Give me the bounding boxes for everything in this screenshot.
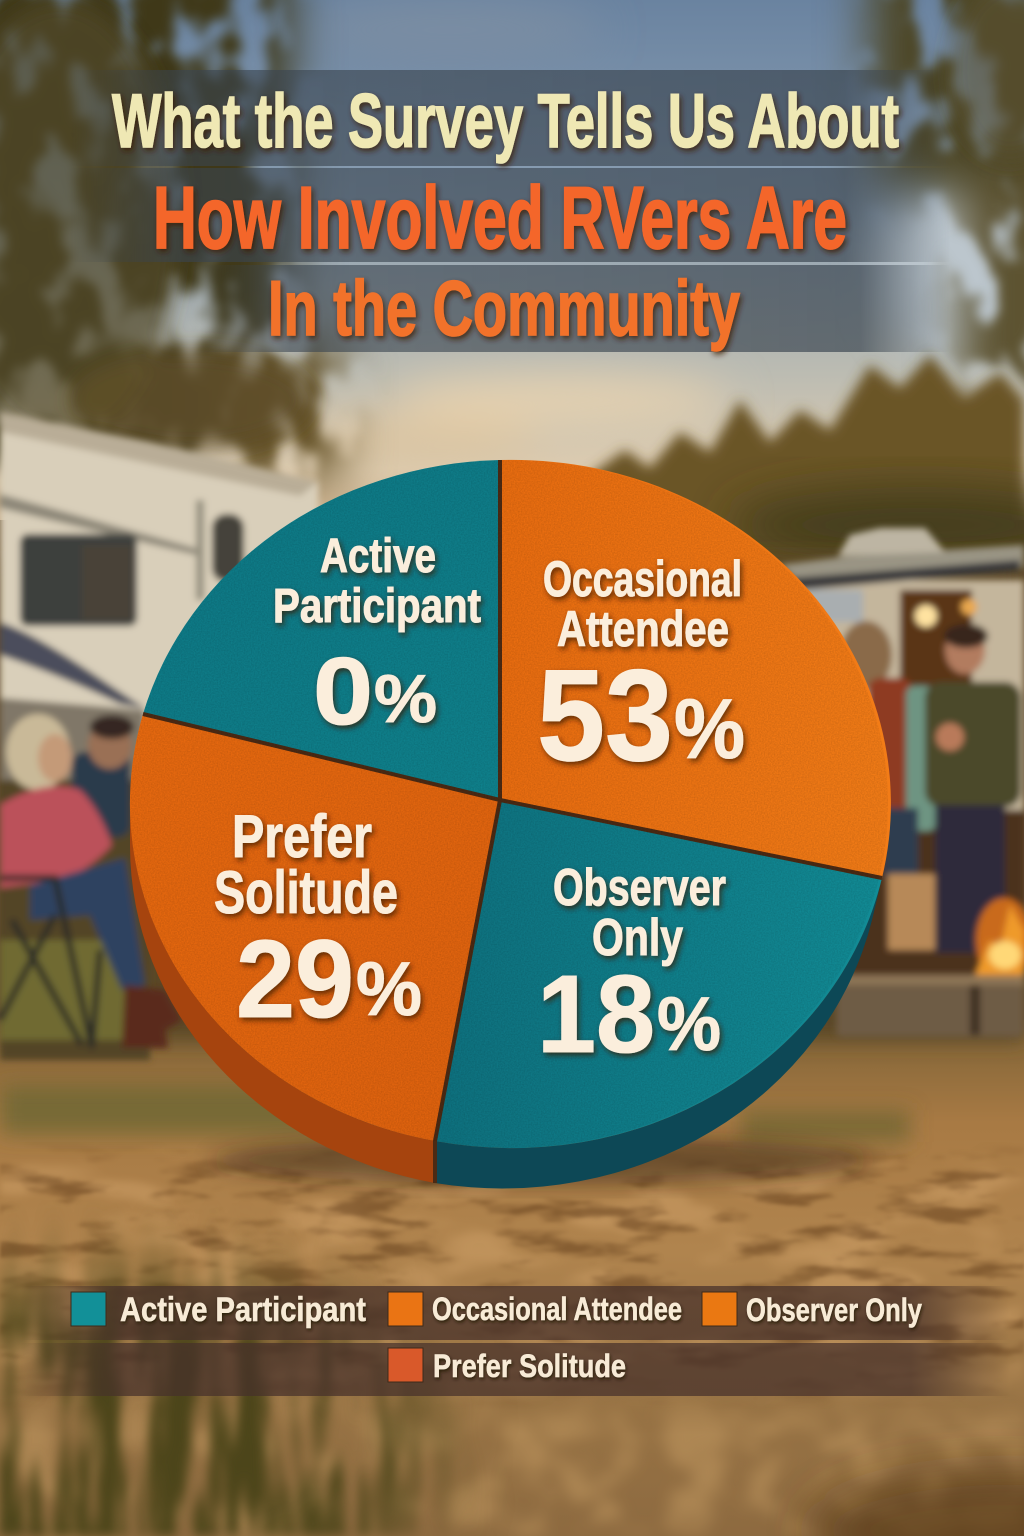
label: prefer solitude 29%: 29 [236,918,354,1041]
label: active participant 0%: % [374,661,437,737]
legend item: active participant: Active Participant [120,1291,366,1329]
label: active participant 0% [273,530,481,745]
left RV [0,412,318,790]
label: occasional attendee 53% [537,551,745,788]
label: observer only 18%: % [657,982,721,1067]
dark tree base behind right RV [730,487,1024,563]
right RV [780,528,1024,980]
clouds [300,0,1024,462]
wedge: active participant [143,460,500,800]
campfire [975,898,1024,982]
label: active participant 0%: 0 [313,638,373,745]
label: occasional attendee 53%: Attendee [557,601,729,657]
pie dividers [143,460,882,1183]
pie surface grain [130,460,890,1150]
fire ring rocks [836,975,1024,1037]
bottom right vignette [810,1470,1024,1536]
pie side: orange [130,804,435,1183]
label: occasional attendee 53%: 53 [537,642,673,788]
legend backing bands [20,1286,1010,1396]
title line 3: In the Community [268,264,740,352]
foreground grass [0,1228,464,1536]
pie side: teal [435,878,882,1188]
legend item: observer only [702,1292,922,1328]
midground band [0,560,1024,1040]
title backing bands [70,70,950,352]
label: prefer solitude 29% [214,803,422,1041]
lower blotchy ground [0,1402,1024,1536]
ground light patches [0,1166,1023,1385]
pie chart [130,460,891,1188]
legend item: prefer solitude: Prefer Solitude [433,1348,626,1384]
label: occasional attendee 53%: % [674,682,745,776]
label: observer only 18%: Observer [553,859,726,917]
legend [20,1286,1010,1396]
ground [0,1020,1024,1536]
pie ground shadow [210,1136,870,1184]
label: occasional attendee 53%: Occasional [543,551,742,607]
wedge: occasional attendee [500,460,891,878]
label: active participant 0%: Participant [273,580,481,633]
legend item: observer only: Observer Only [746,1292,922,1328]
label: observer only 18%: 18 [537,953,655,1076]
blurred foreground scene [0,412,1024,1060]
left people and chair [0,714,182,1060]
grass patches [0,1085,910,1142]
label: prefer solitude 29%: Solitude [214,859,398,926]
ground mottling [0,1140,1024,1410]
label: observer only 18% [537,859,726,1076]
wedge: prefer solitude [130,714,500,1141]
wedge: observer only [435,800,882,1148]
legend item: occasional attendee: Occasional Attendee [432,1291,682,1327]
title [112,79,899,352]
label: observer only 18%: Only [592,909,683,967]
label: active participant 0%: Active [320,530,436,583]
legend item: occasional attendee [388,1291,682,1327]
sky [0,0,1024,520]
right people [840,621,1021,953]
label: prefer solitude 29%: Prefer [232,803,372,870]
solid tree masses [0,0,1024,450]
right tree line [590,355,1024,570]
trees [0,0,1024,480]
label: prefer solitude 29%: % [356,947,422,1032]
